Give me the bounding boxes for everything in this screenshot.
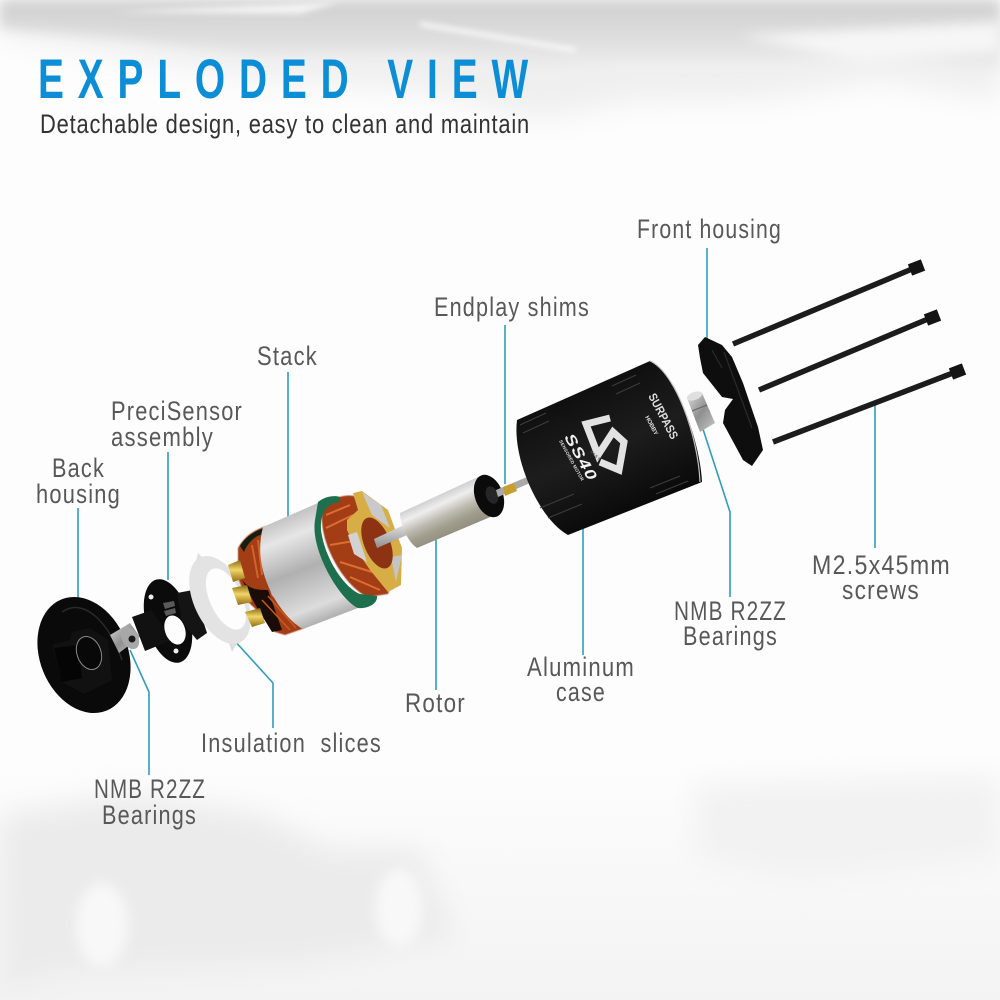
S logo — [586, 418, 624, 470]
labels: Bearings — [102, 800, 197, 830]
labels: Aluminum — [527, 652, 635, 682]
labels — [36, 214, 951, 830]
labels: NMB R2ZZ — [674, 596, 787, 626]
centre winding — [355, 513, 399, 573]
solder tabs — [228, 560, 265, 627]
labels: PreciSensor — [111, 396, 243, 426]
labels: Bearings — [683, 621, 778, 651]
part: M2.5x45mm screws — [733, 265, 964, 442]
gold star — [347, 491, 402, 592]
part: stack — [228, 491, 414, 635]
part: back housing — [21, 583, 147, 727]
part: PreciSensor assembly — [132, 574, 207, 668]
title: EXPLODED VIEW — [38, 47, 542, 110]
silver body — [260, 503, 358, 629]
model caption: SENSORED MOTOR — [558, 439, 585, 482]
labels: Stack — [257, 341, 318, 371]
logo caption: DIST — [589, 449, 602, 462]
labels: housing — [36, 479, 121, 509]
labels: Rotor — [405, 688, 466, 718]
labels: M2.5x45mm — [812, 550, 951, 580]
labels: Insulation slices — [201, 728, 382, 758]
labels: screws — [842, 575, 920, 605]
silver inserts — [362, 492, 390, 528]
labels: Endplay shims — [434, 292, 590, 322]
brand: SURPASS — [645, 391, 681, 442]
part: endplay shims and shaft — [496, 477, 530, 497]
part: right bearing — [686, 390, 715, 432]
copper winding front — [322, 496, 397, 597]
part: front housing — [698, 337, 763, 466]
leader lines — [78, 248, 875, 775]
model name: SS40 — [561, 431, 601, 484]
labels: Front housing — [637, 214, 782, 244]
part: aluminum case — [516, 361, 702, 535]
part: left bearing — [110, 623, 143, 653]
subtitle: Detachable design, easy to clean and maintain — [40, 109, 530, 139]
shaft end — [374, 522, 414, 548]
labels: case — [556, 677, 606, 707]
part: insulation slice — [177, 546, 263, 654]
labels: NMB R2ZZ — [94, 774, 206, 804]
labels: Back — [52, 453, 105, 483]
part: rotor — [400, 471, 510, 548]
labels: assembly — [111, 422, 214, 452]
brand sub: HOBBY — [643, 415, 658, 436]
copper winding rear — [238, 526, 305, 635]
green ring — [314, 496, 377, 608]
